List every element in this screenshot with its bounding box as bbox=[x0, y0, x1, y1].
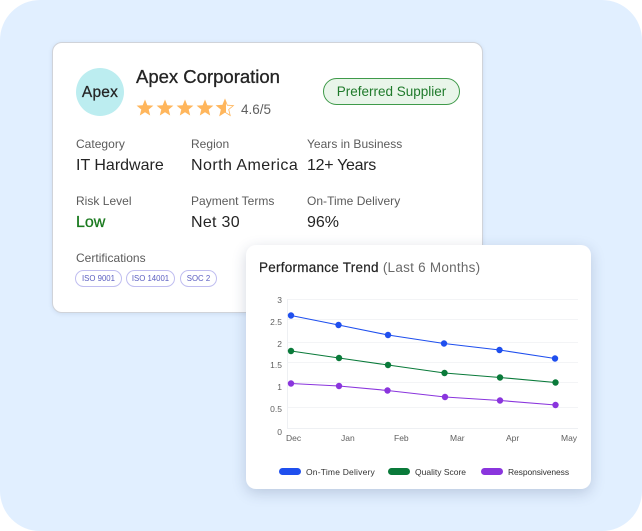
field: Years in Business: 12+ Years bbox=[307, 156, 376, 174]
y axis labels bbox=[270, 295, 282, 437]
field: On-Time Delivery: On-Time Delivery bbox=[307, 194, 400, 208]
series: On-Time Delivery bbox=[288, 312, 558, 362]
field: On-Time Delivery bbox=[307, 194, 400, 230]
y axis labels: 3 bbox=[277, 295, 282, 305]
field: Category: IT Hardware bbox=[76, 156, 164, 174]
field: On-Time Delivery: 96% bbox=[307, 214, 339, 230]
chart panel bbox=[246, 245, 591, 489]
field: Years in Business bbox=[307, 136, 402, 174]
legend: Responsiveness bbox=[508, 467, 569, 477]
field: Payment Terms: Net 30 bbox=[191, 214, 240, 230]
supplier card bbox=[52, 42, 483, 313]
chip: ISO 14001: ISO 14001 bbox=[132, 274, 169, 283]
logo: Apex: Apex bbox=[82, 84, 118, 101]
badge: Preferred Supplier bbox=[323, 78, 460, 105]
chip: SOC 2 bbox=[180, 270, 217, 287]
y axis labels: 0.5 bbox=[270, 404, 282, 414]
chip: ISO 9001 bbox=[75, 270, 122, 287]
field: Risk Level: Risk Level bbox=[76, 194, 132, 208]
chart title: Performance Trend (Last 6 Months) bbox=[259, 260, 480, 275]
x axis labels: Feb bbox=[394, 433, 409, 443]
field: Category bbox=[76, 136, 164, 174]
chip: ISO 14001 bbox=[126, 270, 175, 287]
y axis labels: 0 bbox=[277, 427, 282, 437]
y axis labels: 1.5 bbox=[270, 360, 282, 370]
rating value: 4.6/5 bbox=[241, 102, 271, 117]
field: Region: Region bbox=[191, 136, 229, 150]
x axis labels: Jan bbox=[341, 433, 355, 443]
company name: Apex Corporation bbox=[136, 66, 280, 87]
chip: SOC 2: SOC 2 bbox=[187, 274, 210, 283]
legend bbox=[279, 467, 569, 477]
badge: Preferred Supplier: Preferred Supplier bbox=[337, 84, 446, 99]
field: Years in Business: Years in Business bbox=[307, 136, 402, 150]
logo: Apex bbox=[76, 68, 124, 116]
field: Payment Terms bbox=[191, 194, 274, 230]
x axis labels bbox=[286, 433, 578, 443]
certifications heading: Certifications bbox=[76, 250, 146, 264]
field: Category: Category bbox=[76, 136, 125, 150]
field: Region: North America bbox=[191, 156, 298, 174]
field: Risk Level bbox=[76, 194, 132, 230]
series: Responsiveness bbox=[288, 380, 559, 408]
rating stars bbox=[136, 98, 234, 116]
y axis labels: 2.5 bbox=[270, 317, 282, 327]
x axis labels: Dec bbox=[286, 433, 302, 443]
x axis labels: Mar bbox=[450, 433, 465, 443]
x axis labels: Apr bbox=[506, 433, 519, 443]
y axis labels: 1 bbox=[277, 382, 282, 392]
legend: Quality Score bbox=[415, 467, 466, 477]
y axis labels: 2 bbox=[277, 339, 282, 349]
series: Quality Score bbox=[288, 348, 559, 386]
legend: On-Time Delivery bbox=[306, 467, 376, 477]
field: Payment Terms: Payment Terms bbox=[191, 194, 274, 208]
field: Risk Level: Low bbox=[76, 214, 105, 230]
x axis labels: May bbox=[561, 433, 578, 443]
field: Region bbox=[191, 136, 298, 174]
chip: ISO 9001: ISO 9001 bbox=[82, 274, 115, 283]
